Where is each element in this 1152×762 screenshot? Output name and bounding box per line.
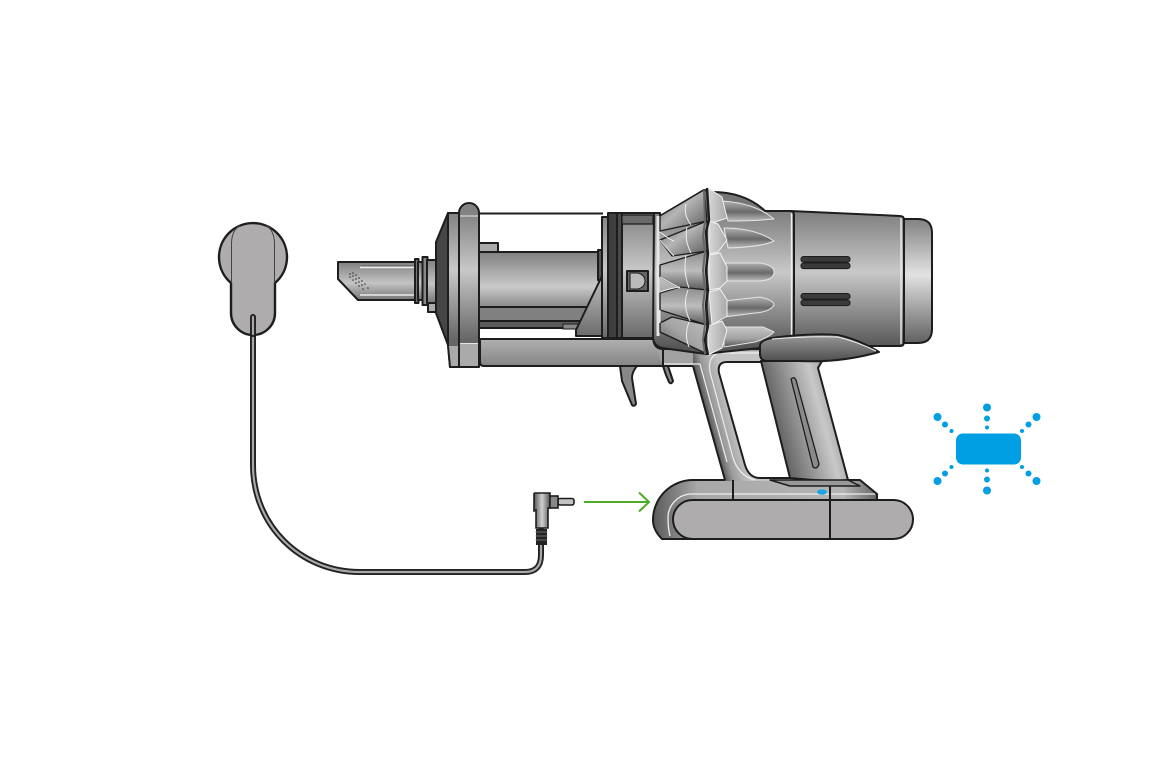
nozzle	[338, 262, 416, 300]
neck highlight	[722, 352, 761, 354]
cap highlight	[772, 337, 876, 351]
base seams	[733, 480, 830, 500]
indicator light	[817, 489, 827, 495]
handle top cap	[760, 334, 879, 361]
strut highlights	[664, 352, 755, 480]
blue indicator rectangle	[956, 434, 1021, 464]
battery	[673, 500, 913, 539]
charger connector plug	[534, 493, 574, 545]
neck	[653, 338, 765, 366]
cyclone ridges	[703, 188, 727, 355]
bin latch wedge	[576, 274, 604, 336]
cyclone drum	[653, 190, 794, 354]
rear grip	[761, 361, 848, 481]
charger cable	[253, 317, 541, 572]
clasp	[627, 271, 648, 291]
charger wall plug	[219, 223, 287, 335]
motor body	[790, 211, 932, 346]
clear bin	[479, 214, 603, 329]
signal dots	[934, 404, 1040, 494]
cyclone fingers	[722, 201, 774, 347]
cyclone collar housing	[602, 213, 654, 338]
triggers	[620, 366, 673, 406]
front strut	[693, 351, 795, 481]
vacuum	[338, 188, 932, 539]
bin end cap	[436, 203, 479, 367]
base trim	[668, 494, 875, 536]
battery foot cover	[770, 480, 860, 486]
blue indicator signal	[934, 404, 1040, 494]
base	[653, 480, 877, 539]
rail	[480, 339, 663, 366]
green arrow	[584, 492, 649, 512]
cyclone cones	[660, 190, 707, 353]
nozzle collars	[415, 257, 437, 312]
